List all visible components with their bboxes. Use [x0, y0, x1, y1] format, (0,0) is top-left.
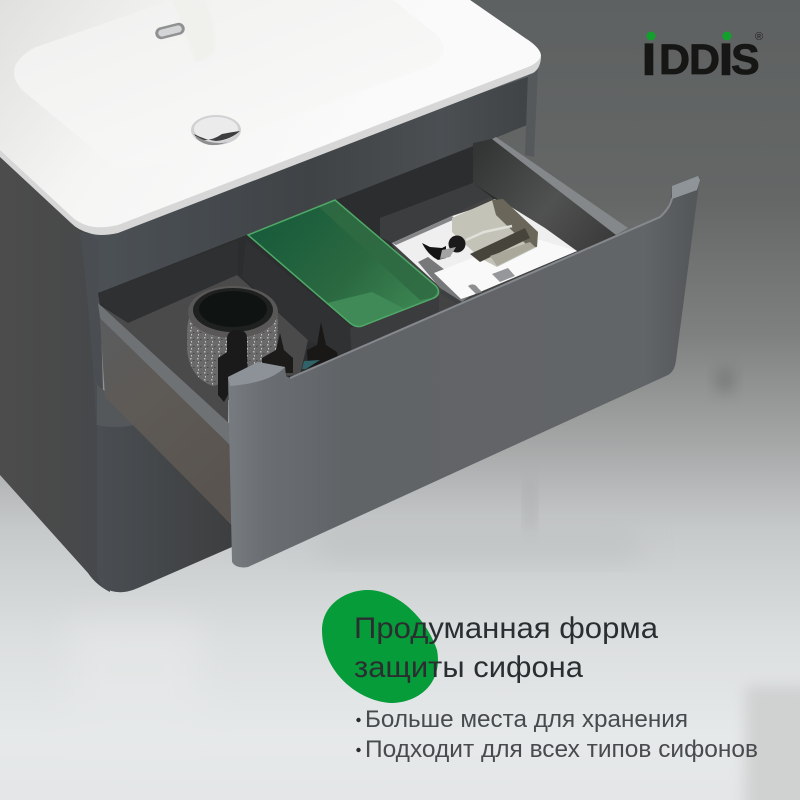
bottle: dropper — [262, 333, 293, 373]
right grip — [672, 176, 700, 199]
icon: overflow hole — [154, 22, 186, 40]
green accent blob — [322, 590, 438, 703]
bullet list — [356, 706, 758, 763]
panel top edge highlight — [290, 198, 672, 378]
right cabinet post — [525, 68, 538, 157]
upper cabinet rail — [86, 68, 538, 293]
lower cabinet drawer — [97, 385, 232, 592]
bottle: dropper with teal label — [307, 322, 338, 368]
bullet: all siphon types: Подходит для всех типов сифонов — [365, 736, 758, 763]
open drawer front panel — [228, 176, 700, 567]
logo dot: second i — [722, 32, 732, 40]
cabinet body, left side — [0, 150, 110, 592]
drawer left rim — [98, 303, 232, 447]
logo dot: first i — [646, 32, 656, 40]
logo registered mark: ® — [755, 31, 763, 43]
drawer right inner wall — [473, 139, 618, 253]
interior base — [98, 125, 618, 400]
faucet reflection — [171, 0, 215, 62]
drawer rail — [440, 290, 462, 305]
drawer right rim — [492, 137, 628, 235]
washbasin — [0, 0, 541, 235]
icon: soap pump — [422, 226, 512, 260]
bullet: more storage: Больше места для хранения — [365, 706, 688, 733]
jar with glitter — [187, 286, 278, 386]
towel and organiser contents — [392, 199, 577, 305]
heading: защиты сифона — [354, 651, 583, 684]
cabinet corner post — [80, 232, 103, 425]
back wall left — [98, 240, 238, 323]
heading — [354, 612, 658, 684]
logo: IDDIS: D — [659, 36, 690, 84]
logo: IDDIS: S — [731, 36, 760, 84]
drawer interior — [98, 125, 628, 425]
left grip — [228, 362, 285, 386]
logo: IDDIS — [643, 31, 763, 84]
icon: soap dish — [452, 199, 538, 267]
green storage box — [242, 200, 439, 362]
drawer left side wall — [98, 303, 234, 527]
heading: Продуманная форма — [354, 612, 658, 645]
logo: IDDIS: D — [689, 36, 720, 84]
logo: IDDIS: I — [720, 36, 732, 84]
bottle: spray — [218, 330, 248, 402]
icon: drain — [191, 115, 241, 145]
logo: IDDIS: I — [643, 36, 655, 84]
floor right — [380, 183, 590, 320]
small black bottles — [218, 322, 338, 402]
floor left — [100, 275, 308, 425]
